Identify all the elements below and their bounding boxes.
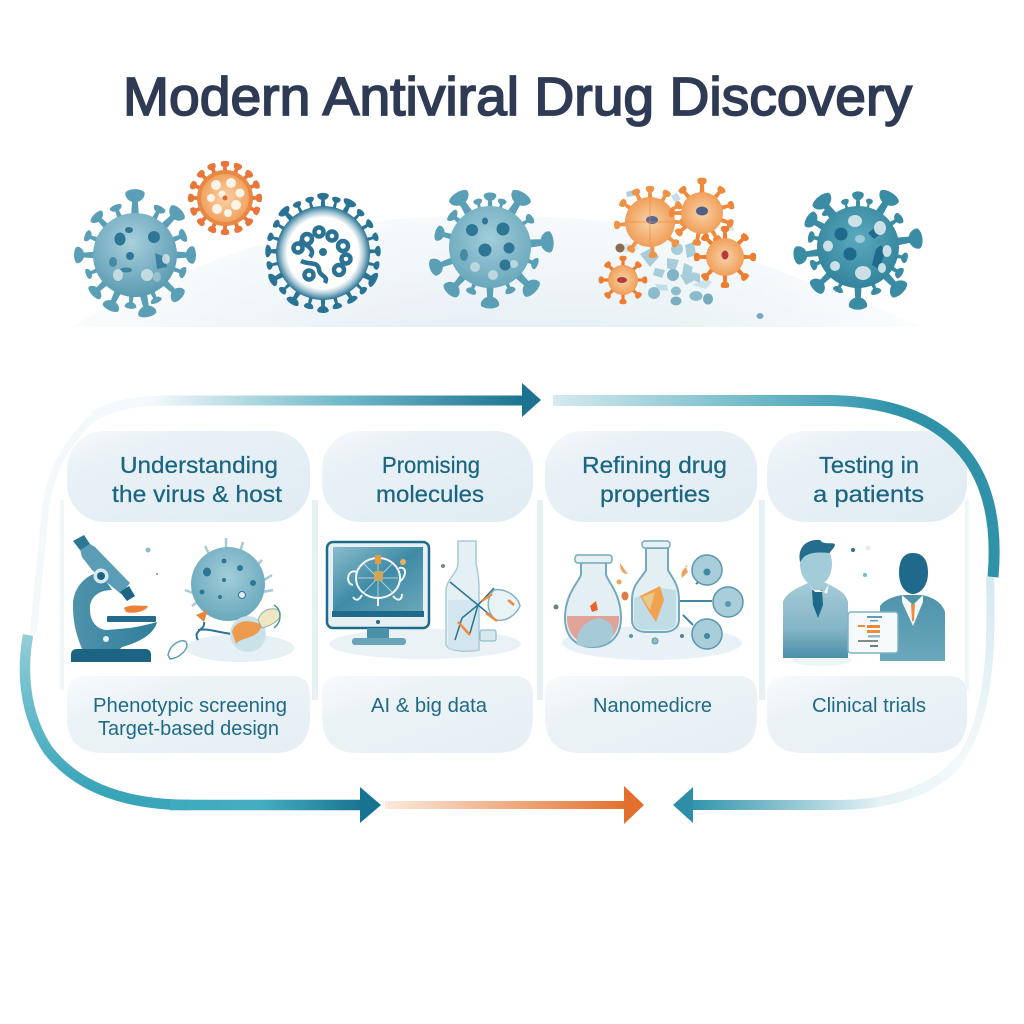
heading — [582, 452, 727, 507]
icon: teal virus 5 — [792, 187, 924, 310]
panel: refining drug properties — [545, 431, 757, 753]
label: AI & big data — [371, 695, 488, 717]
panel: column outlines — [62, 500, 967, 700]
icon: teal virus 1 — [74, 189, 196, 319]
orange virus a — [614, 186, 686, 258]
icon: orange virus cluster with fragments — [599, 178, 764, 319]
panel: testing in patients — [767, 431, 967, 753]
heading pill — [67, 431, 310, 522]
label — [93, 695, 287, 740]
icon: virus with host cell — [168, 538, 294, 662]
heading pill — [767, 431, 967, 522]
arrow: orange centre — [385, 786, 644, 824]
label: Nanomedicre — [593, 695, 712, 717]
icon: microscope — [71, 535, 158, 662]
heading pill — [322, 431, 533, 522]
label pill — [767, 676, 967, 753]
virus band — [72, 161, 925, 327]
icon: ring virus — [265, 193, 381, 313]
icon: small orange virus — [188, 161, 262, 235]
arrow: top left flow — [93, 383, 541, 417]
heading: molecules — [376, 481, 484, 507]
heading: Understanding — [120, 452, 278, 478]
panel: promising molecules — [322, 431, 533, 753]
heading — [112, 452, 282, 507]
arrow: top right flow curving down — [553, 400, 994, 577]
icon: clinician with patient and tablet — [783, 540, 945, 666]
heading — [376, 452, 484, 507]
icon: teal virus 3 — [427, 187, 555, 308]
arrow: right faded return — [960, 577, 991, 760]
arrow: left pale rise — [33, 417, 93, 633]
heading: Testing in — [819, 452, 919, 478]
heading: Promising — [382, 452, 480, 478]
label: Phenotypic screening — [93, 695, 287, 717]
label: Target-based design — [98, 718, 279, 740]
title: Modern Antiviral Drug Discovery — [123, 67, 912, 127]
label: Clinical trials — [812, 695, 926, 717]
heading: a patients — [813, 481, 924, 507]
arrow: bottom right flow to centre — [673, 760, 960, 823]
blue fragments — [618, 189, 764, 319]
icon: bottle with molecular network — [441, 541, 520, 651]
heading pill — [545, 431, 757, 522]
icon: computer monitor — [327, 542, 521, 659]
label pill — [322, 676, 533, 753]
orange virus c — [694, 226, 756, 288]
heading — [813, 452, 924, 507]
orange virus b — [669, 178, 735, 246]
label pill — [545, 676, 757, 753]
heading: Refining drug — [582, 452, 727, 478]
panel: understanding the virus and host — [67, 431, 310, 753]
orange virus d — [599, 256, 647, 304]
arrow: bottom left flow — [25, 635, 381, 823]
heading: properties — [600, 481, 710, 507]
label pill — [67, 676, 310, 753]
process frame — [62, 431, 967, 753]
icon: flasks and nanoparticles — [554, 541, 743, 660]
heading: the virus & host — [112, 481, 282, 507]
pale ground wash — [72, 216, 925, 327]
